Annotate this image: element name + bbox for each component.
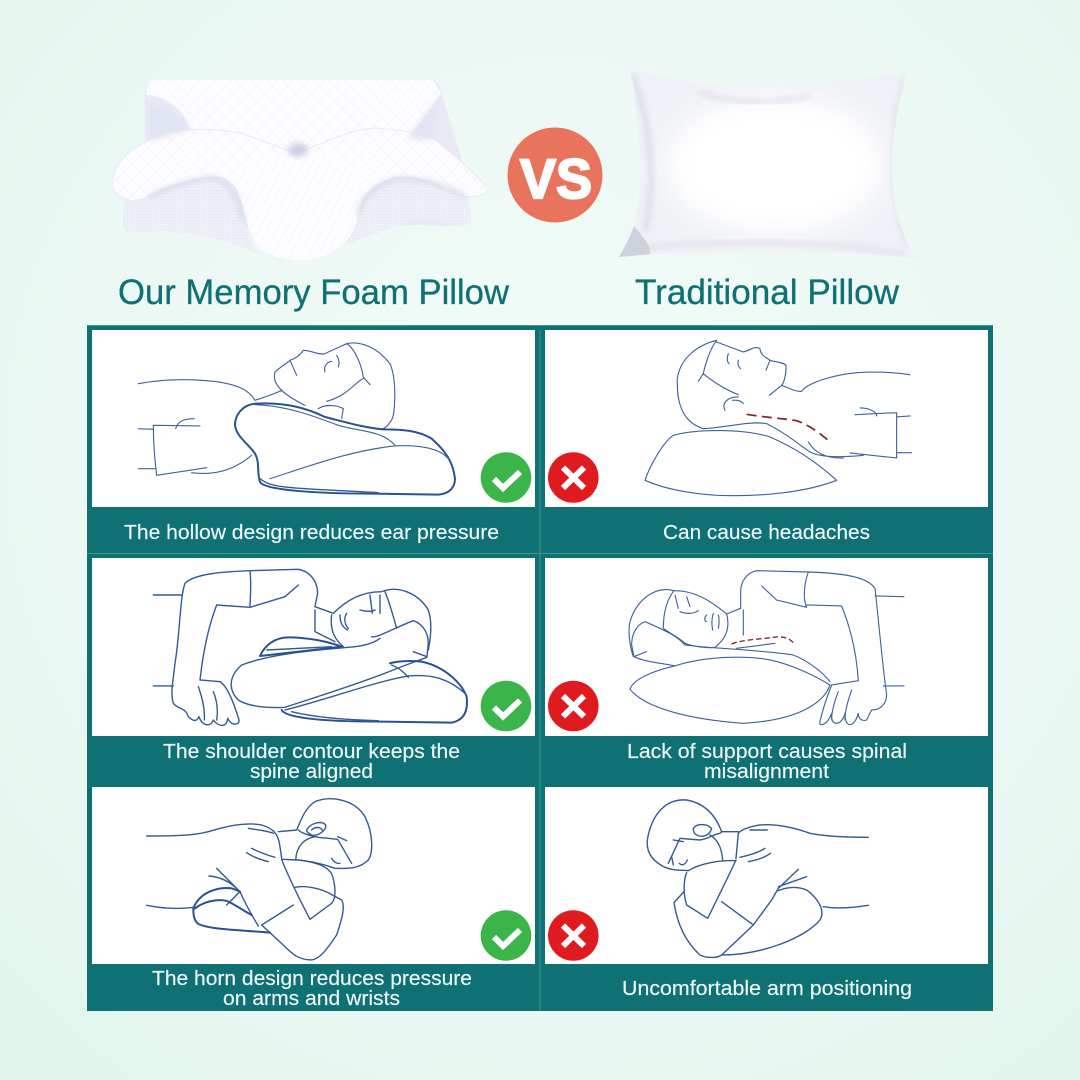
caption: The shoulder contour keeps the [163, 740, 460, 763]
heading: memory foam pillow: Our Memory Foam Pillow [118, 273, 510, 312]
caption: The hollow design reduces ear pressure [124, 521, 499, 544]
heading: traditional pillow: Traditional Pillow [635, 273, 900, 312]
spine dashed line [747, 414, 828, 440]
caption: Uncomfortable arm positioning [622, 977, 912, 1000]
icon: red cross row 1 [548, 452, 599, 503]
caption [163, 740, 460, 783]
caption [627, 740, 907, 783]
caption: Lack of support causes spinal [627, 740, 907, 763]
row 1 left: hollow design [92, 330, 535, 544]
icon: green check row 2 [481, 681, 531, 731]
illustration: head raised on traditional pillow [645, 340, 912, 496]
icon: red cross row 2 [548, 681, 599, 731]
illustration: side lying head on contour pillow [138, 343, 455, 495]
icon: green check row 3 [481, 910, 531, 961]
row 1 right: headaches [545, 330, 988, 544]
caption: on arms and wrists [223, 987, 400, 1010]
caption: spine aligned [250, 760, 373, 783]
icon: red cross row 3 [548, 910, 599, 961]
VS badge: VS [520, 147, 592, 210]
icon: green check row 1 [481, 452, 531, 503]
caption: misalignment [704, 760, 829, 783]
traditional pillow photo [619, 70, 918, 260]
row 2 right: spinal misalignment [545, 558, 988, 783]
illustration: side sleeper on traditional pillow [629, 571, 904, 725]
caption: The horn design reduces pressure [152, 967, 472, 990]
row 3 right: arm positioning [545, 787, 988, 1000]
caption: Can cause headaches [663, 521, 870, 544]
comparison table frame [87, 325, 993, 1011]
row 3 left: horn design [92, 787, 535, 1010]
memory foam pillow photo [112, 80, 489, 261]
spine dashed line [732, 637, 793, 644]
illustration: side sleeper with shoulder contour pillow [153, 569, 467, 725]
VS badge [508, 128, 602, 222]
row 2 left: shoulder contour [92, 558, 535, 783]
illustration: arms around horn pillow [147, 799, 372, 960]
caption [152, 967, 472, 1010]
illustration: arms around traditional pillow [647, 800, 868, 957]
